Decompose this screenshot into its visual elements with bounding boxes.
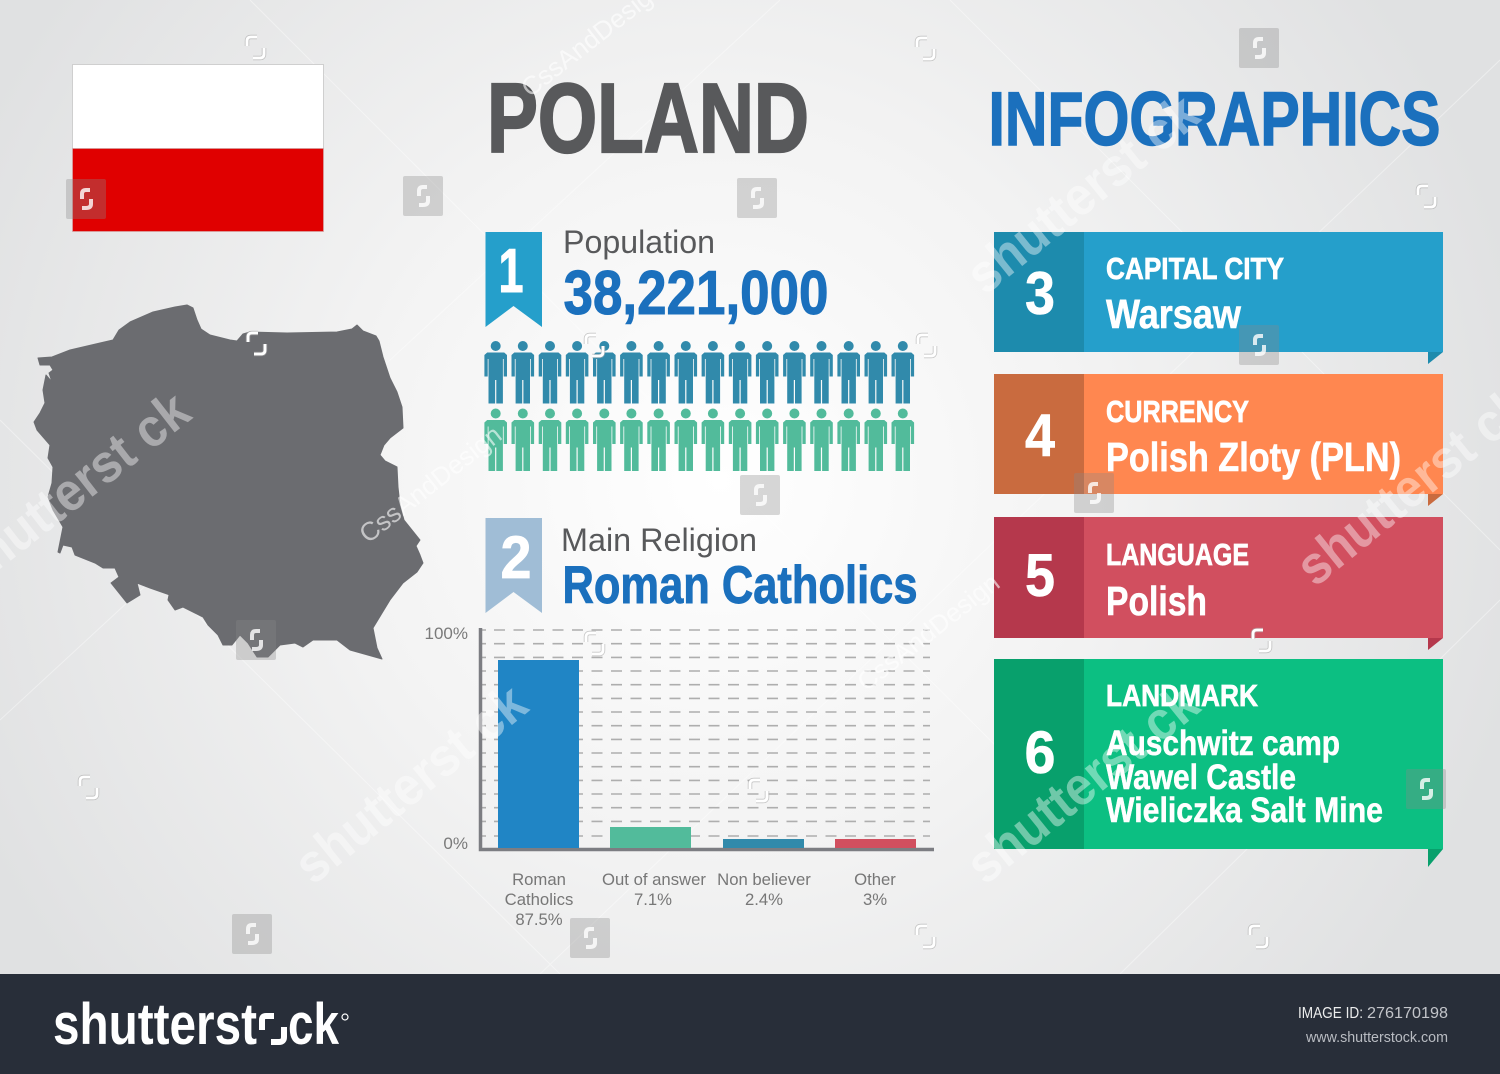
title: Poland: POLAND bbox=[487, 63, 809, 173]
people row: green bbox=[484, 408, 914, 471]
value: landmark list bbox=[1106, 724, 1383, 830]
category label: Out of answer: 7.1% bbox=[634, 890, 672, 909]
number 6: 6 bbox=[1024, 719, 1056, 786]
heading: landmark: LANDMARK bbox=[1106, 678, 1259, 713]
footer bar bbox=[0, 974, 1500, 1074]
value: Polish: Polish bbox=[1106, 578, 1207, 624]
category label: Non believer: Non believer bbox=[717, 870, 811, 889]
image id: 276170198 bbox=[1367, 1005, 1448, 1022]
ribbon badge 2: 2 bbox=[500, 524, 532, 591]
watermarks: CssAndDesign bbox=[353, 419, 507, 549]
number 5: 5 bbox=[1025, 542, 1055, 609]
category label: Out of answer: Out of answer bbox=[602, 870, 706, 889]
category label: Non believer: 2.4% bbox=[745, 890, 783, 909]
heading: language: LANGUAGE bbox=[1106, 537, 1249, 572]
axis label: 100%: 100% bbox=[425, 624, 468, 643]
flag of Poland bbox=[72, 64, 324, 232]
watermarks: shutterst ck bbox=[955, 82, 1211, 305]
ribbon badge 1: 1 bbox=[498, 237, 524, 306]
religion value: Roman Catholics bbox=[562, 556, 918, 615]
footer logo: ck bbox=[288, 992, 340, 1057]
panel 6: landmark bbox=[994, 659, 1443, 867]
watermarks: CssAndDesign bbox=[851, 567, 1005, 697]
value: landmark list: Auschwitz camp bbox=[1106, 724, 1340, 763]
panel 5: language bbox=[994, 517, 1443, 650]
category label: Other: Other bbox=[854, 870, 896, 889]
image id: IMAGE ID: bbox=[1298, 1005, 1363, 1022]
category label: Roman Catholics: 87.5% bbox=[515, 910, 563, 929]
chart axes bbox=[480, 628, 934, 850]
ribbon badge 2 bbox=[486, 518, 542, 613]
axis label: 0%: 0% bbox=[443, 834, 468, 853]
category label: Roman Catholics: Catholics bbox=[505, 890, 573, 909]
bar: Out of answer bbox=[610, 827, 691, 848]
population label: Population bbox=[563, 224, 715, 260]
number 4: 4 bbox=[1025, 402, 1056, 469]
value: landmark list: Wawel Castle bbox=[1106, 758, 1296, 797]
bar chart: religion shares bbox=[425, 624, 934, 929]
population value: 38,221,000 bbox=[564, 259, 828, 328]
panel 3: capital city bbox=[994, 232, 1443, 364]
heading: capital city: CAPITAL CITY bbox=[1106, 251, 1284, 286]
value: Polish Zloty: Polish Zloty (PLN) bbox=[1106, 434, 1401, 480]
category label: Other: 3% bbox=[863, 890, 887, 909]
heading: currency: CURRENCY bbox=[1106, 394, 1249, 429]
bar: Roman Catholics bbox=[498, 660, 579, 848]
image id bbox=[1298, 1005, 1448, 1022]
value: Warsaw: Warsaw bbox=[1106, 291, 1241, 337]
watermarks: shutterst ck bbox=[955, 672, 1211, 895]
footer logo: shutterst bbox=[53, 992, 257, 1057]
bar: Non believer bbox=[723, 839, 804, 848]
footer url: www.shutterstock.com bbox=[1305, 1030, 1448, 1046]
section 1: population bbox=[484, 224, 914, 471]
religion label: Main Religion bbox=[561, 522, 757, 558]
watermarks: shutterst ck bbox=[283, 672, 539, 895]
map of Poland bbox=[34, 305, 423, 659]
bar: Other bbox=[835, 839, 916, 848]
value: landmark list: Wieliczka Salt Mine bbox=[1106, 791, 1383, 830]
section 2: main religion bbox=[486, 518, 918, 615]
people row: blue bbox=[484, 341, 914, 404]
number 3: 3 bbox=[1025, 260, 1055, 327]
category label: Roman Catholics: Roman bbox=[512, 870, 566, 889]
panel 4: currency bbox=[994, 374, 1443, 506]
ribbon badge 1 bbox=[486, 232, 542, 327]
